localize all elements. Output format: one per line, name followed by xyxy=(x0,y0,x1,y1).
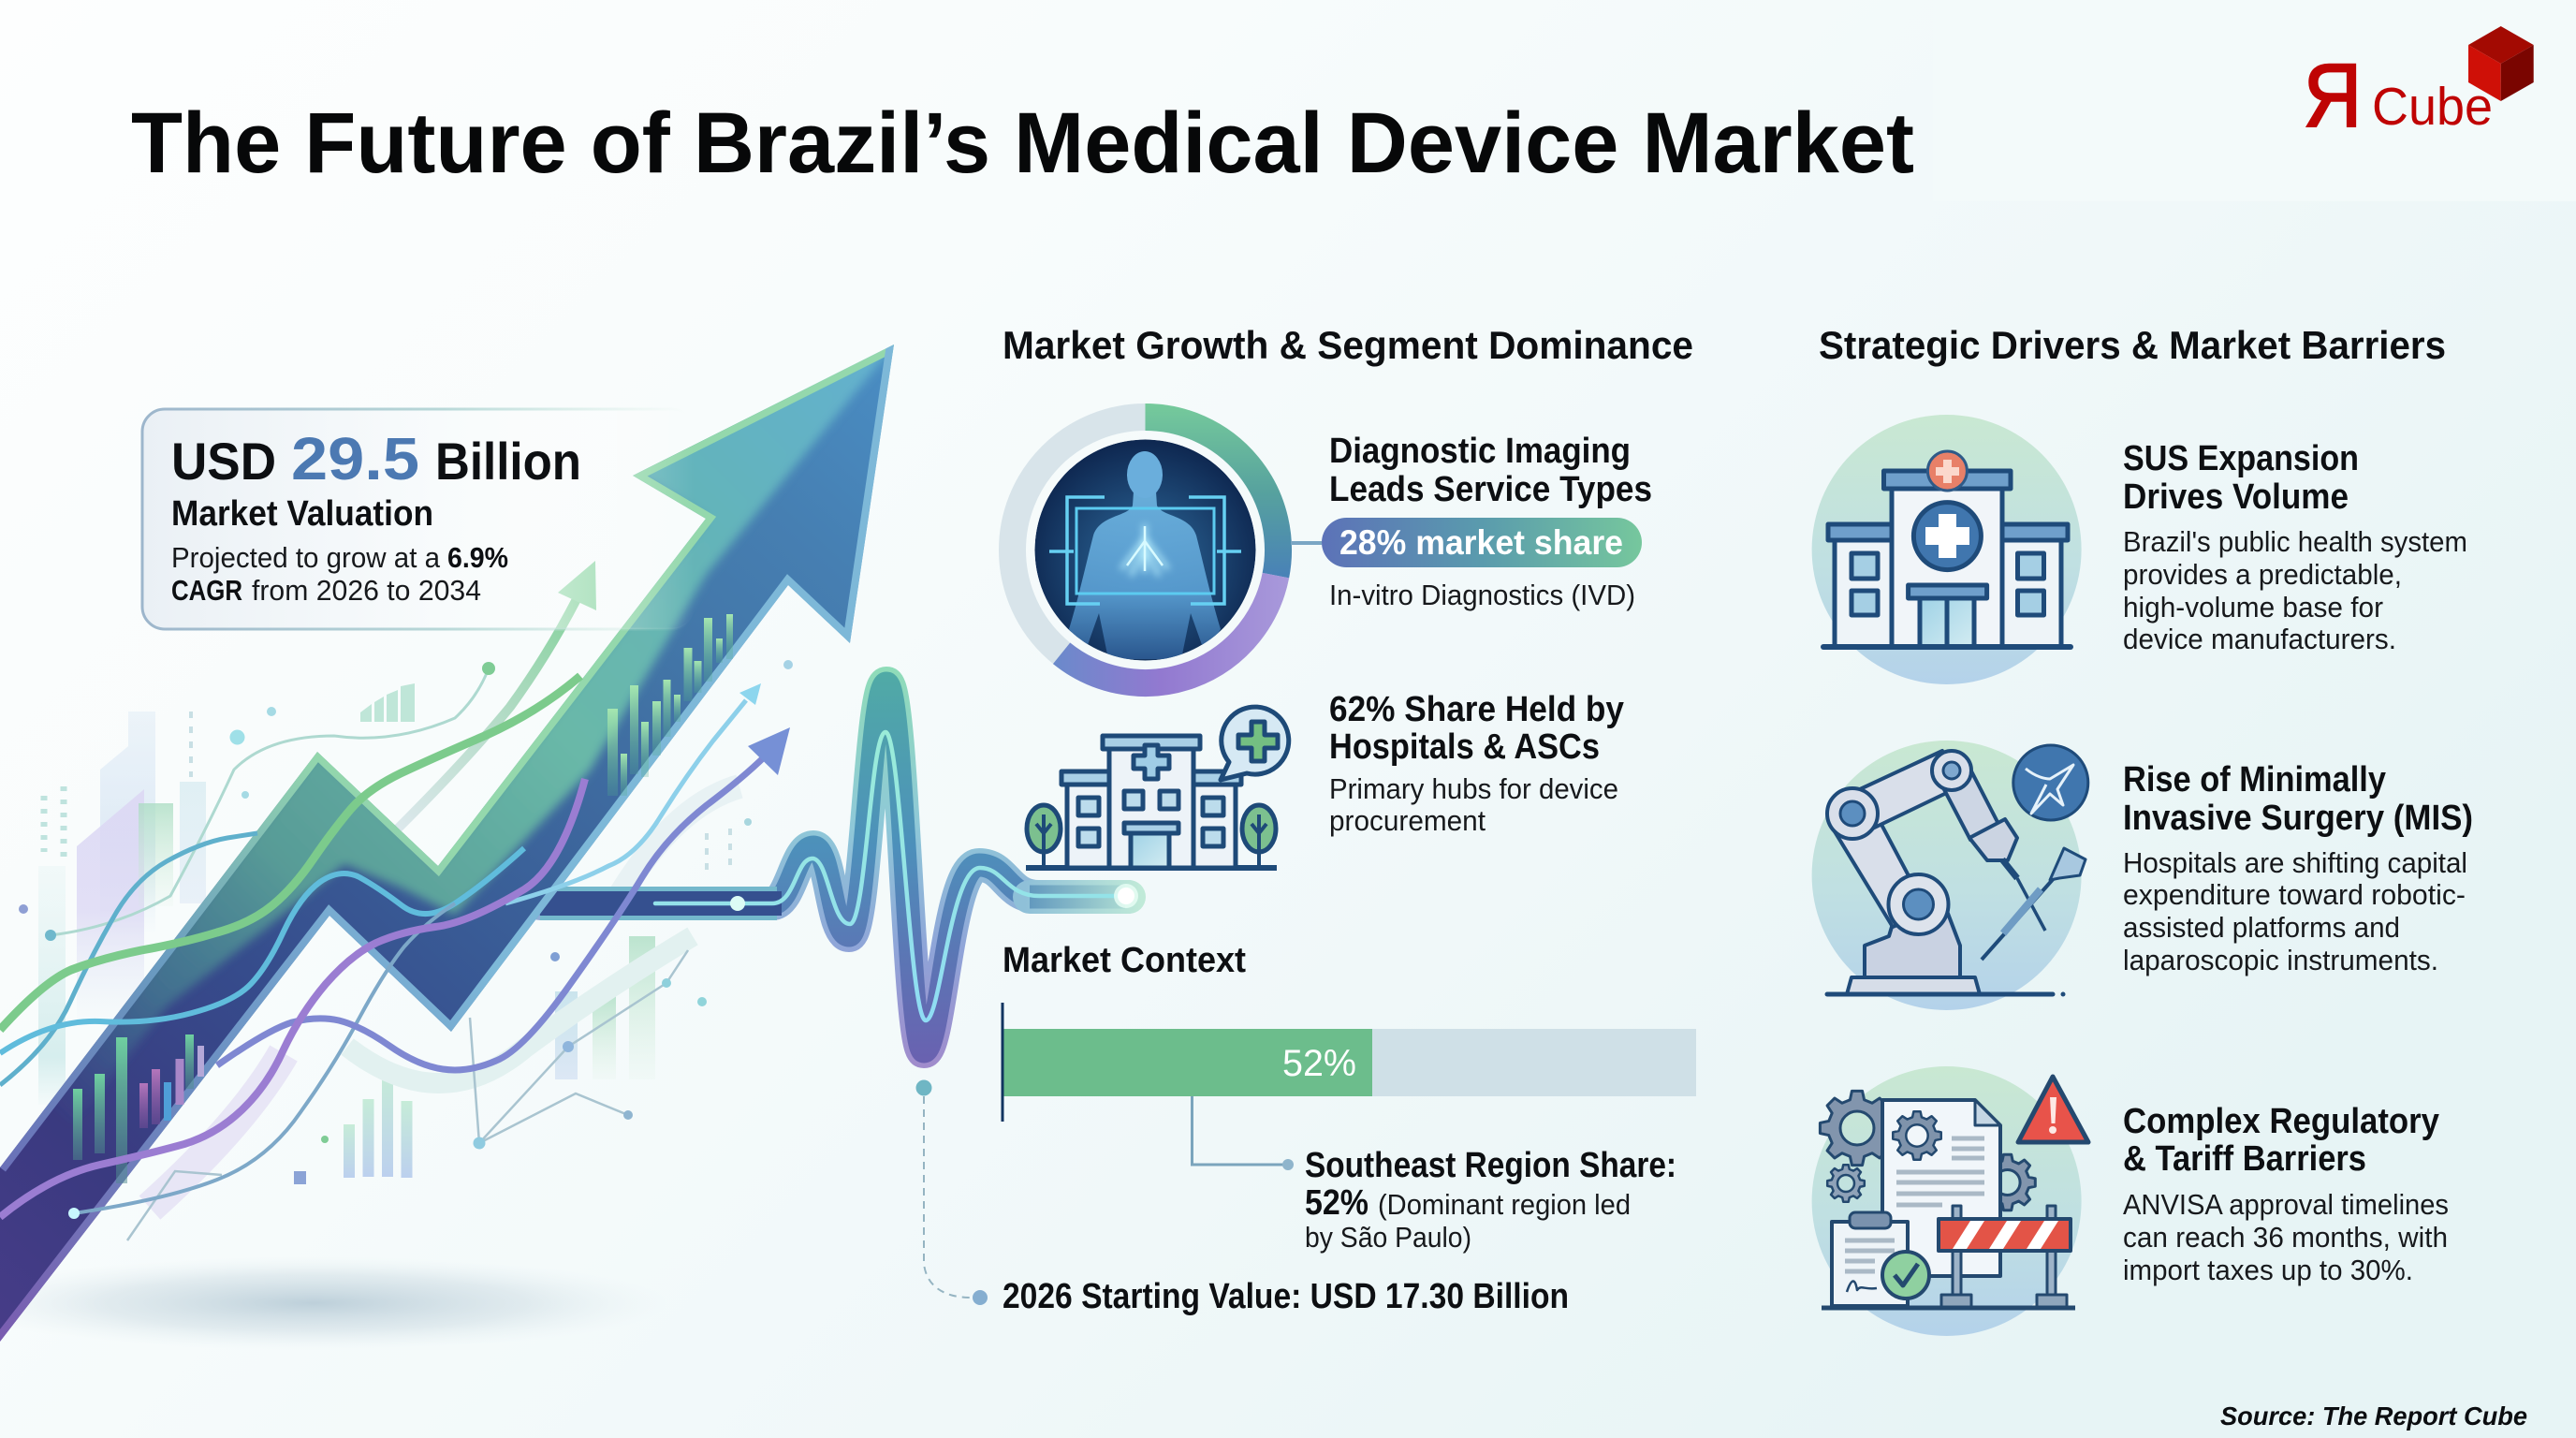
text: hospitals share: 62% Share Held by xyxy=(1329,690,1624,729)
stat callout: USD 29.5 Billion: Market Valuation xyxy=(171,494,433,534)
stat callout: USD 29.5 Billion: USD xyxy=(171,432,276,491)
purple growth line xyxy=(0,779,585,1217)
logo: RCube: Cube xyxy=(2372,77,2493,137)
pale ribbon with green arrow xyxy=(398,561,596,829)
hero chart illustration xyxy=(0,345,1138,1350)
rising arrow xyxy=(0,345,894,1342)
heading: market context: Market Context xyxy=(1003,941,1246,980)
market share pill: 28% market share xyxy=(1339,523,1623,562)
text: diagnostic imaging: In-vitro Diagnostics (IVD) xyxy=(1329,579,1635,611)
stat callout: USD 29.5 Billion: from 2026 to 2034 xyxy=(252,574,481,607)
text: SUS expansion: Drives Volume xyxy=(2123,477,2349,517)
text: SUS expansion: device manufacturers. xyxy=(2123,623,2396,655)
text: southeast region: 52% xyxy=(1305,1183,1368,1223)
text: starting value: 2026 Starting Value: USD 17.30 Billion xyxy=(1003,1277,1569,1316)
text: hospitals share xyxy=(1329,690,1624,837)
body scan icon xyxy=(1035,440,1256,661)
data dots xyxy=(19,660,793,1150)
logo: RCube: Я xyxy=(2304,46,2362,146)
text: hospitals share: Hospitals & ASCs xyxy=(1329,727,1600,767)
connector to pill xyxy=(1291,541,1322,545)
text: regulatory barriers xyxy=(2123,1102,2449,1286)
bars on arrow upper xyxy=(607,614,733,796)
stat callout: USD 29.5 Billion: Billion xyxy=(435,432,581,491)
heading: strategic drivers: Strategic Drivers & Market Barriers xyxy=(1819,323,2446,367)
text: hospitals share: Primary hubs for device xyxy=(1329,772,1618,805)
stat callout: USD 29.5 Billion xyxy=(142,409,695,629)
periwinkle growth line xyxy=(217,727,790,1070)
heading: market growth: Market Growth & Segment Dominance xyxy=(1003,323,1693,367)
thin steel line xyxy=(68,903,455,1219)
text: southeast region: (Dominant region led xyxy=(1378,1188,1631,1221)
text: SUS expansion: high-volume base for xyxy=(2123,591,2383,624)
bar chart: southeast share: 52% xyxy=(1282,1043,1356,1084)
text: diagnostic imaging: Diagnostic Imaging xyxy=(1329,432,1631,471)
bars on arrow lower xyxy=(73,1034,204,1183)
text: minimally invasive surgery: expenditure toward robotic- xyxy=(2123,878,2466,911)
connector: region share xyxy=(1193,1096,1294,1170)
text: hospitals share: procurement xyxy=(1329,804,1486,837)
cyan arrow line xyxy=(505,683,761,903)
text: minimally invasive surgery: assisted platforms and xyxy=(2123,911,2400,944)
text: SUS expansion: Brazil's public health system xyxy=(2123,525,2467,558)
icon: hospital with speech bubble xyxy=(1026,707,1289,868)
background pale bars xyxy=(38,683,739,1208)
text: regulatory barriers: ANVISA approval timelines xyxy=(2123,1188,2449,1221)
source note: Source: The Report Cube xyxy=(2220,1401,2527,1431)
thin top line xyxy=(51,668,489,935)
thin teal-blue line xyxy=(0,833,257,1085)
donut chart with body scan xyxy=(1013,417,1279,683)
text: southeast region: by São Paulo) xyxy=(1305,1221,1471,1254)
blue growth line xyxy=(0,848,524,1053)
text: minimally invasive surgery: Hospitals are shifting capital xyxy=(2123,846,2467,879)
stat callout: USD 29.5 Billion: CAGR xyxy=(171,574,242,607)
text: SUS expansion: SUS Expansion xyxy=(2123,439,2359,478)
icon: regulatory barriers xyxy=(1812,1066,2088,1336)
text: diagnostic imaging: Leads Service Types xyxy=(1329,470,1652,509)
text: regulatory barriers: import taxes up to 30%. xyxy=(2123,1254,2413,1286)
heartbeat line xyxy=(540,683,1129,1051)
stat callout: USD 29.5 Billion: 29.5 xyxy=(291,425,419,492)
text: SUS expansion xyxy=(2123,439,2467,655)
text: southeast region: Southeast Region Share: xyxy=(1305,1146,1676,1185)
ground shadow xyxy=(0,1256,669,1350)
text: minimally invasive surgery: Rise of Minimally xyxy=(2123,760,2386,800)
net lines xyxy=(127,950,688,1240)
text: minimally invasive surgery xyxy=(2123,760,2473,976)
dashed connector: starting value xyxy=(915,1080,988,1305)
green growth line xyxy=(0,676,580,1030)
stat callout: USD 29.5 Billion: Projected to grow at a xyxy=(171,541,441,574)
text: regulatory barriers: can reach 36 months, with xyxy=(2123,1221,2448,1254)
text: regulatory barriers: & Tariff Barriers xyxy=(2123,1139,2366,1179)
logo: RCube xyxy=(2304,26,2534,146)
bar chart: southeast share xyxy=(1003,1003,1696,1122)
icon: surgical robot xyxy=(1812,741,2088,1010)
icon: SUS hospital xyxy=(1812,415,2082,684)
text: minimally invasive surgery: Invasive Surgery (MIS) xyxy=(2123,799,2473,838)
text: minimally invasive surgery: laparoscopic instruments. xyxy=(2123,944,2438,976)
title: The Future of Brazil’s Medical Device Market xyxy=(131,95,1914,191)
text: regulatory barriers: Complex Regulatory xyxy=(2123,1102,2439,1141)
stat callout: USD 29.5 Billion: 6.9% xyxy=(447,541,508,574)
text: southeast region xyxy=(1305,1146,1676,1254)
text: diagnostic imaging xyxy=(1329,432,1652,611)
text: SUS expansion: provides a predictable, xyxy=(2123,558,2402,591)
